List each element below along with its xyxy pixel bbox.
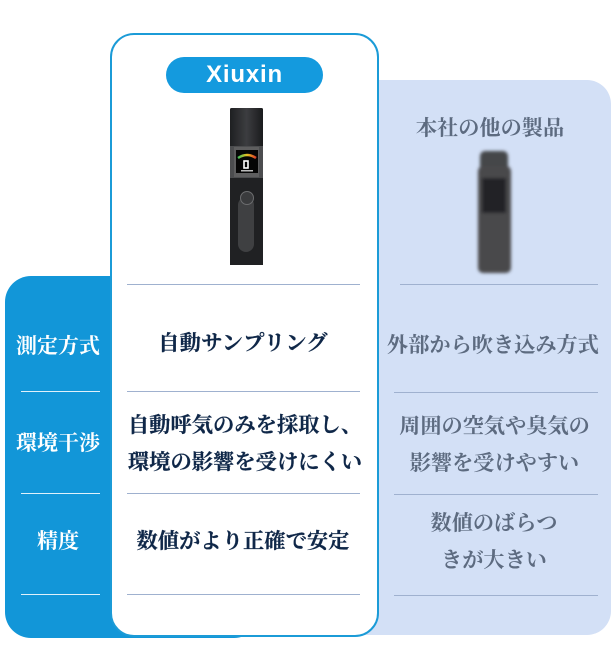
logo pill: Xiuxin: Xiuxin (206, 61, 283, 88)
row text: more accurate: 数値がより正確で安定 (136, 529, 349, 553)
row text: affected by surrounding air (399, 414, 590, 475)
row text: breath only: 環境の影響を受けにくい (128, 450, 362, 474)
label: environmental interference: 環境干渉 (16, 431, 100, 455)
panel: other products (340, 80, 611, 635)
label: accuracy: 精度 (37, 529, 79, 553)
row text: external blow-in: 外部から吹き込み方式 (387, 333, 599, 357)
label: measurement method: 測定方式 (16, 334, 100, 358)
row text: breath only (128, 413, 362, 474)
panel: row labels (5, 276, 260, 638)
product image: breath analyzer (230, 108, 263, 265)
row text: affected by surrounding air: 周囲の空気や臭気の (399, 414, 590, 438)
row text: affected by surrounding air: 影響を受けやすい (410, 451, 579, 475)
row text: breath only: 自動呼気のみを採取し、 (128, 413, 362, 437)
row text: large variation (431, 511, 557, 572)
logo pill: Xiuxin (166, 57, 323, 93)
row text: automatic sampling: 自動サンプリング (158, 331, 328, 355)
row text: large variation: 数値のばらつ (431, 511, 557, 535)
panel: Xiuxin product (110, 33, 379, 637)
product image: blurred device (476, 148, 514, 276)
row text: large variation: きが大きい (441, 548, 547, 572)
heading: other products: 本社の他の製品 (416, 116, 564, 140)
